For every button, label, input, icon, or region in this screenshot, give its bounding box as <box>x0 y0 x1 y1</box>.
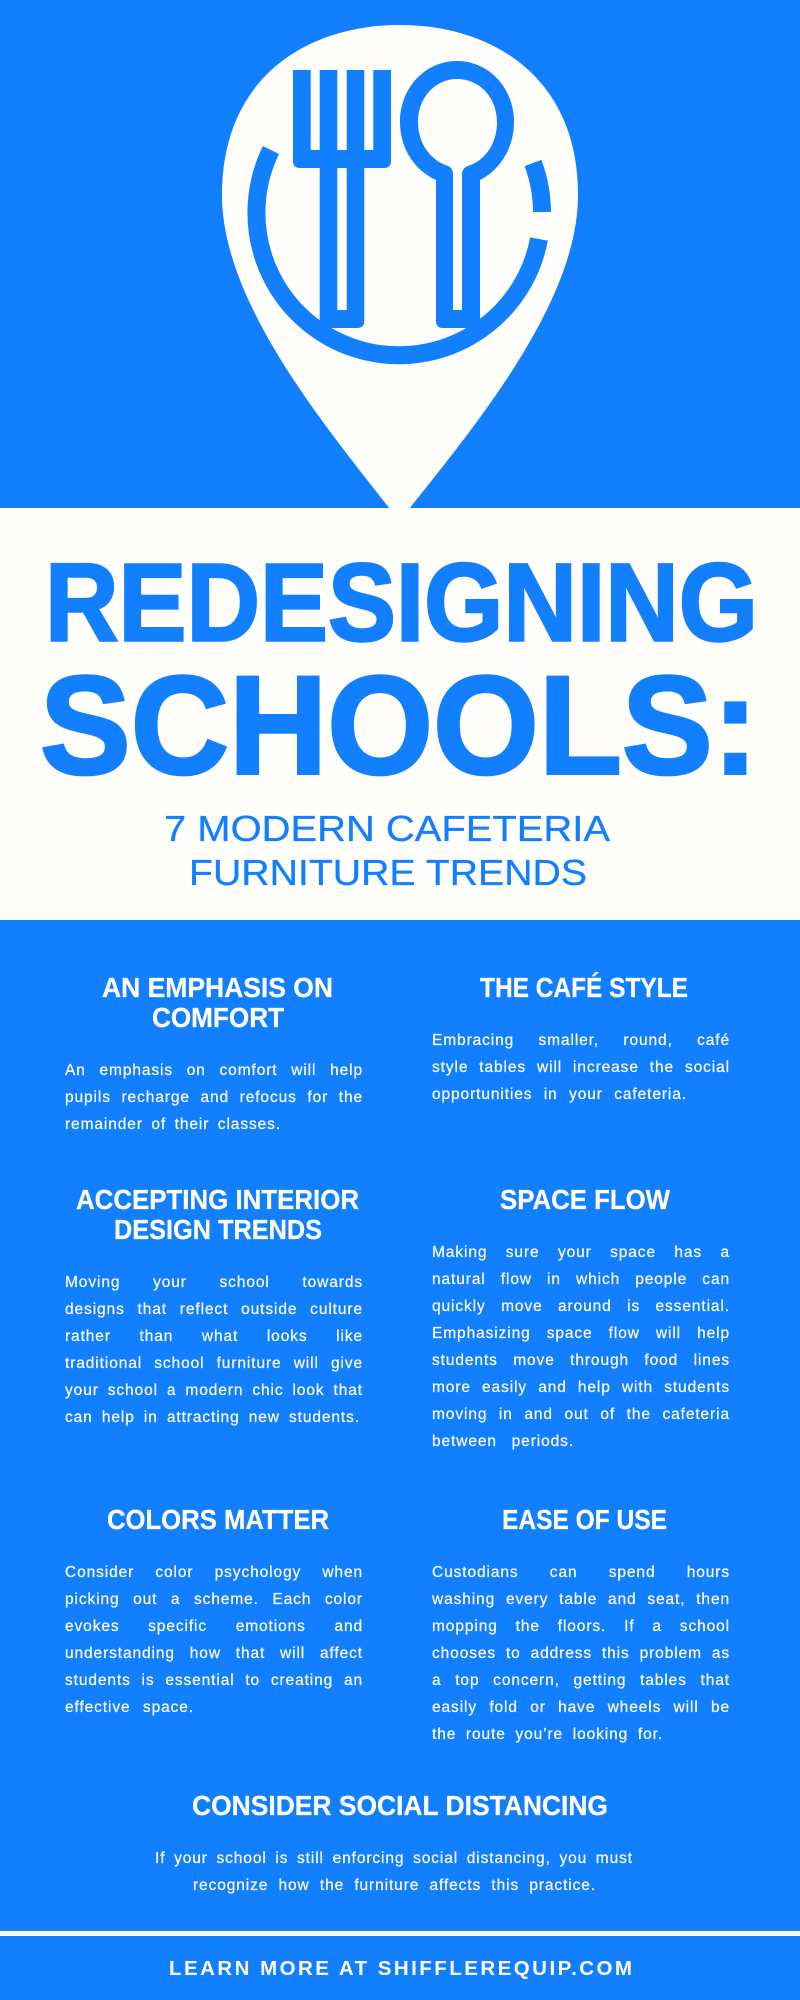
heading <box>76 1184 359 1245</box>
title <box>40 542 758 804</box>
text block <box>65 1564 363 1716</box>
text block: Making sure your space has a <box>432 1244 730 1261</box>
text block: moving in and out of the cafeteria <box>432 1406 730 1423</box>
subtitle: 7 MODERN CAFETERIA <box>164 808 611 849</box>
text block: opportunities in your cafeteria. <box>432 1086 687 1103</box>
divider bar <box>0 1931 800 1936</box>
text block: can help in attracting new students. <box>65 1409 360 1426</box>
text block: pupils recharge and refocus for the <box>65 1089 363 1106</box>
heading: DESIGN TRENDS <box>114 1214 322 1245</box>
text block: a top concern, getting tables that <box>432 1672 730 1689</box>
text block: evokes specific emotions and <box>65 1618 363 1635</box>
text block: effective space. <box>65 1699 194 1716</box>
panel: ease of use <box>432 1504 730 1743</box>
text block: quickly move around is essential. <box>432 1298 730 1315</box>
text block: traditional school furniture will give <box>65 1355 363 1372</box>
title: REDESIGNING <box>45 542 758 664</box>
text block: designs that reflect outside culture <box>65 1301 363 1318</box>
text block: rather than what looks like <box>65 1328 363 1345</box>
text block <box>432 1244 730 1450</box>
text block: washing every table and seat, then <box>432 1591 730 1608</box>
text block: understanding how that will affect <box>65 1645 363 1662</box>
icon: fork <box>293 70 391 328</box>
text block: students is essential to creating an <box>65 1672 363 1689</box>
text block: style tables will increase the social <box>432 1059 730 1076</box>
footer call to action: LEARN MORE AT SHIFFLEREQUIP.COM <box>169 1957 632 1980</box>
panel: an emphasis on comfort <box>64 972 363 1133</box>
text block: picking out a scheme. Each color <box>65 1591 363 1608</box>
text block: more easily and help with students <box>432 1379 730 1396</box>
subtitle <box>164 808 611 893</box>
panel: accepting interior design trends <box>64 1184 363 1426</box>
text block: mopping the floors. If a school <box>432 1618 730 1635</box>
top band and cream title band background <box>0 0 800 920</box>
pin shape <box>222 25 578 509</box>
text block: recognize how the furniture affects this practice. <box>193 1877 596 1894</box>
text block <box>64 1274 363 1426</box>
icon: spoon <box>400 61 514 328</box>
text block: your school a modern chic look that <box>65 1382 363 1399</box>
text block: remainder of their classes. <box>65 1116 281 1133</box>
heading: COMFORT <box>152 1002 284 1033</box>
text block: Emphasizing space flow will help <box>432 1325 730 1342</box>
panel: space flow <box>432 1184 730 1450</box>
heading: AN EMPHASIS ON <box>102 972 333 1003</box>
text block <box>155 1850 633 1894</box>
heading: COLORS MATTER <box>107 1504 329 1535</box>
text block: Consider color psychology when <box>65 1564 363 1581</box>
heading: ACCEPTING INTERIOR <box>76 1184 359 1215</box>
heading: CONSIDER SOCIAL DISTANCING <box>192 1790 608 1821</box>
text block <box>432 1032 730 1103</box>
icon: plate arc <box>256 150 539 355</box>
text block: chooses to address this problem as <box>432 1645 730 1662</box>
text block: Custodians can spend hours <box>432 1564 730 1581</box>
panel: the cafe style <box>432 972 730 1103</box>
text block: natural flow in which people can <box>432 1271 730 1288</box>
text block <box>432 1564 730 1743</box>
text block: Embracing smaller, round, café <box>432 1032 730 1049</box>
text block <box>64 1062 363 1133</box>
panel: consider social distancing <box>155 1790 633 1894</box>
heading: SPACE FLOW <box>500 1184 671 1215</box>
icon: map pin with fork and spoon <box>222 25 578 509</box>
heading: THE CAFÉ STYLE <box>480 972 688 1003</box>
icon: plate arc short segment <box>533 163 542 212</box>
text block: An emphasis on comfort will help <box>65 1062 363 1079</box>
text block: Moving your school towards <box>65 1274 363 1291</box>
heading: EASE OF USE <box>502 1504 667 1535</box>
text block: between periods. <box>432 1433 574 1450</box>
heading <box>102 972 333 1033</box>
text block: students move through food lines <box>432 1352 730 1369</box>
text block: If your school is still enforcing social distancing, you must <box>155 1850 633 1867</box>
panel: colors matter <box>65 1504 363 1716</box>
text block: easily fold or have wheels will be <box>432 1699 730 1716</box>
text block: the route you’re looking for. <box>432 1726 663 1743</box>
title: SCHOOLS: <box>40 646 758 804</box>
subtitle: FURNITURE TRENDS <box>189 852 587 893</box>
